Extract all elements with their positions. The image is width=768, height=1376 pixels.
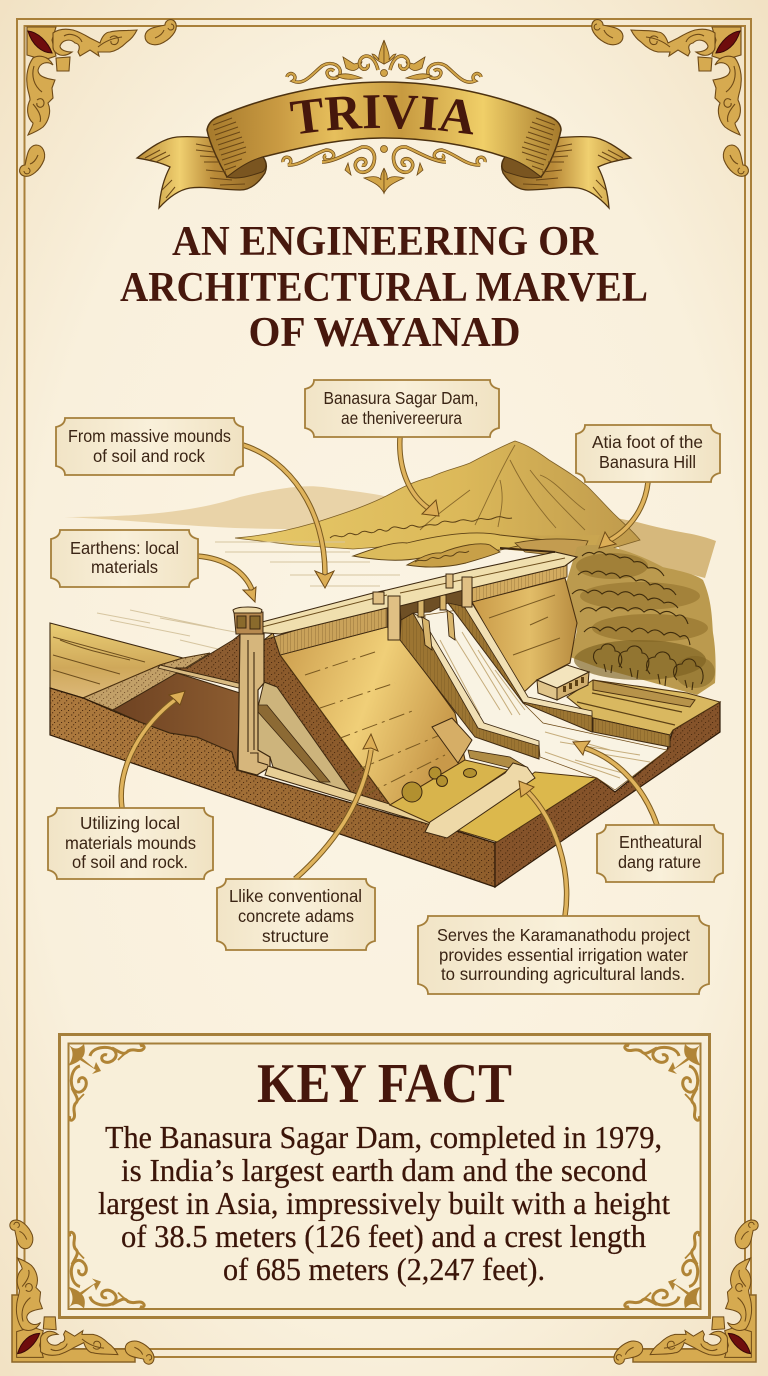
spillway left wall xyxy=(400,613,539,759)
upper brown wedge xyxy=(175,633,242,688)
key fact corner ornaments xyxy=(68,1044,701,1308)
far right ridge xyxy=(600,515,716,578)
terraces xyxy=(567,680,720,735)
back dam wall xyxy=(515,539,588,558)
terrace retaining wall xyxy=(593,718,670,747)
apron block xyxy=(432,718,472,763)
foreground islands xyxy=(353,533,545,560)
callout: spillway water xyxy=(597,825,723,882)
crest piers xyxy=(373,574,472,640)
inner filter zone xyxy=(257,682,353,795)
main mountain xyxy=(235,441,640,552)
gate tower xyxy=(233,607,263,634)
mountain ridges xyxy=(420,445,585,530)
ribbon banner xyxy=(136,81,632,210)
callout: local materials: Utilizing local xyxy=(80,813,180,833)
callout: concrete structure: concrete adams xyxy=(238,906,354,926)
banner title xyxy=(293,128,474,135)
ribbon fold shadows xyxy=(227,157,541,178)
crest road xyxy=(248,552,577,634)
tree crowns row xyxy=(594,644,622,673)
hatched low wall xyxy=(468,750,528,775)
ribbon band xyxy=(207,82,561,177)
arrow: concrete structure xyxy=(295,734,378,879)
callout: spillway water: Entheatural xyxy=(619,832,702,852)
powerhouse building xyxy=(537,665,589,700)
panel: key fact xyxy=(60,1034,710,1318)
callout: concrete structure: structure xyxy=(262,926,329,946)
right wall ribs xyxy=(472,558,567,602)
callout: massive mounds: From massive mounds xyxy=(68,426,231,446)
main title: AN ENGINEERING OR xyxy=(172,219,599,265)
spillway water xyxy=(425,610,667,790)
key fact body xyxy=(98,1120,670,1287)
callout: earthen materials: Earthens: local xyxy=(70,538,179,558)
ribbon hatching xyxy=(145,118,623,198)
ornament below banner xyxy=(283,146,485,193)
callout: local materials: of soil and rock. xyxy=(72,852,188,872)
arrow: local materials xyxy=(121,691,185,808)
main title: ARCHITECTURAL MARVEL xyxy=(120,265,648,311)
key fact body: is India’s largest earth dam and the second xyxy=(121,1153,647,1188)
right dam face xyxy=(472,578,577,693)
core tower shaft xyxy=(238,630,270,775)
key fact body: largest in Asia, impressively built with a height xyxy=(98,1186,670,1221)
filter stripe xyxy=(257,705,330,782)
hatched embankment xyxy=(83,653,210,710)
face survey lines xyxy=(305,652,445,795)
forest on the right xyxy=(565,545,716,695)
meadow xyxy=(390,760,508,823)
reservoir lines xyxy=(97,542,400,650)
callout: hill foot xyxy=(576,425,720,482)
arrow: mounds to crest xyxy=(243,445,334,588)
lower core wedge xyxy=(113,673,240,770)
main title: OF WAYANAD xyxy=(248,310,520,356)
callout: local materials: materials mounds xyxy=(65,833,196,853)
callout: spillway water: dang rature xyxy=(618,852,701,872)
canal xyxy=(425,763,535,838)
callout: hill foot: Banasura Hill xyxy=(599,452,696,472)
arrow: irrigation xyxy=(519,781,567,916)
brown downstream slope xyxy=(264,633,390,805)
callout: irrigation: provides essential irrigation water xyxy=(439,945,688,965)
gate recess xyxy=(400,590,462,620)
callout: hill foot: Atia foot of the xyxy=(592,432,703,452)
callout: dam name: Banasura Sagar Dam, xyxy=(324,388,478,408)
key fact heading: KEY FACT xyxy=(257,1053,512,1115)
left bank xyxy=(50,623,183,698)
callout: concrete structure: Llike conventional xyxy=(229,886,362,906)
callout: irrigation: to surrounding agricultural lands. xyxy=(441,964,685,984)
dam illustration xyxy=(50,441,720,887)
arrow: spillway water xyxy=(573,741,657,825)
callout: irrigation xyxy=(418,916,709,994)
arrow: dam name to hill xyxy=(400,437,439,516)
right ribbon tail xyxy=(502,137,631,208)
mountain foot scrub xyxy=(330,517,512,538)
callout: irrigation: Serves the Karamanathodu project xyxy=(437,925,690,945)
arrow: hill foot xyxy=(599,482,648,548)
spillway right wall xyxy=(448,603,592,732)
callout: earthen materials: materials xyxy=(91,557,158,577)
callout: concrete structure xyxy=(217,879,375,950)
callout: dam name xyxy=(305,380,499,437)
callout: massive mounds: of soil and rock xyxy=(93,446,205,466)
key fact body: of 685 meters (2,247 feet). xyxy=(223,1252,545,1287)
arrow: earthen materials xyxy=(197,556,256,602)
key fact body: of 38.5 meters (126 feet) and a crest length xyxy=(121,1219,646,1254)
callout: dam name: ae thenivereerura xyxy=(341,408,462,428)
strut xyxy=(158,665,247,690)
chute gates xyxy=(418,595,455,650)
callout: earthen materials xyxy=(51,530,198,587)
upper wall xyxy=(264,602,387,655)
key fact body: The Banasura Sagar Dam, completed in 1979, xyxy=(105,1120,662,1155)
right soil front xyxy=(495,702,720,887)
main dam face xyxy=(280,627,465,805)
callout: massive mounds xyxy=(56,418,243,475)
distant hill xyxy=(64,486,390,529)
left ribbon tail xyxy=(137,137,266,208)
soil left front xyxy=(50,688,495,887)
water streaks xyxy=(440,630,650,778)
callout: local materials xyxy=(48,808,213,879)
main title xyxy=(120,219,648,356)
far shore fill xyxy=(490,535,600,557)
meadow trees xyxy=(402,767,476,802)
ribbon banner: TRIVIA xyxy=(290,95,474,134)
ornament above banner xyxy=(287,40,481,82)
toe strip xyxy=(265,766,431,825)
